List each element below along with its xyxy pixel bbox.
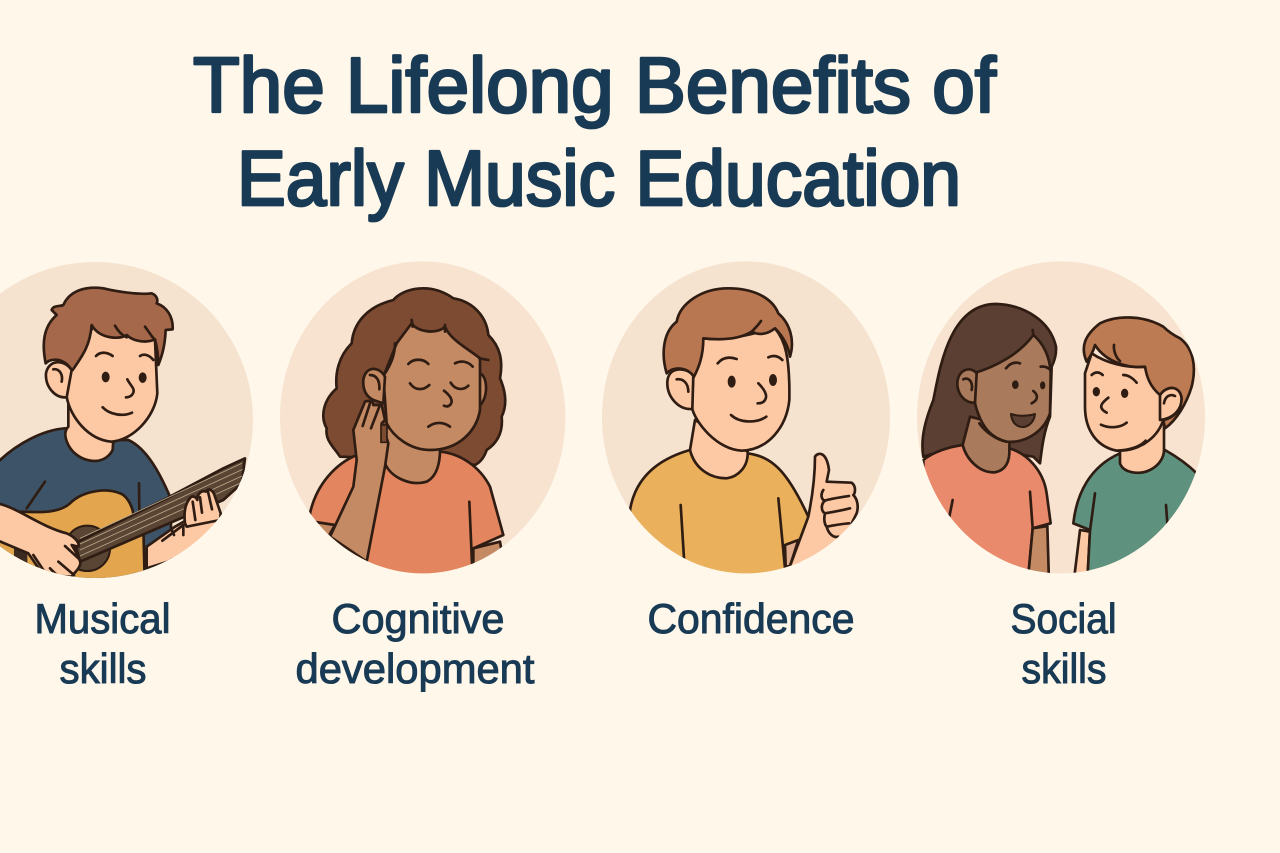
illustration: two children talking [917, 261, 1205, 593]
label: musical skills: skills [60, 645, 146, 692]
title: Early Music Education [237, 134, 961, 222]
illustration: boy giving thumbs up [602, 261, 890, 593]
label: cognitive development: development [296, 645, 535, 692]
panel: social skills [917, 261, 1205, 692]
label: cognitive development: Cognitive [332, 595, 504, 642]
label: social skills: Social [1010, 595, 1116, 642]
label: confidence: Confidence [648, 595, 854, 642]
panel: confidence [602, 261, 890, 642]
illustration: child playing guitar [0, 262, 253, 593]
illustration: girl listening [280, 261, 565, 593]
panel: musical skills [0, 262, 253, 692]
title [193, 41, 996, 222]
label: social skills: skills [1022, 645, 1106, 692]
title: The Lifelong Benefits of [193, 41, 996, 129]
panel: cognitive development [280, 261, 565, 692]
label: musical skills: Musical [34, 595, 170, 642]
